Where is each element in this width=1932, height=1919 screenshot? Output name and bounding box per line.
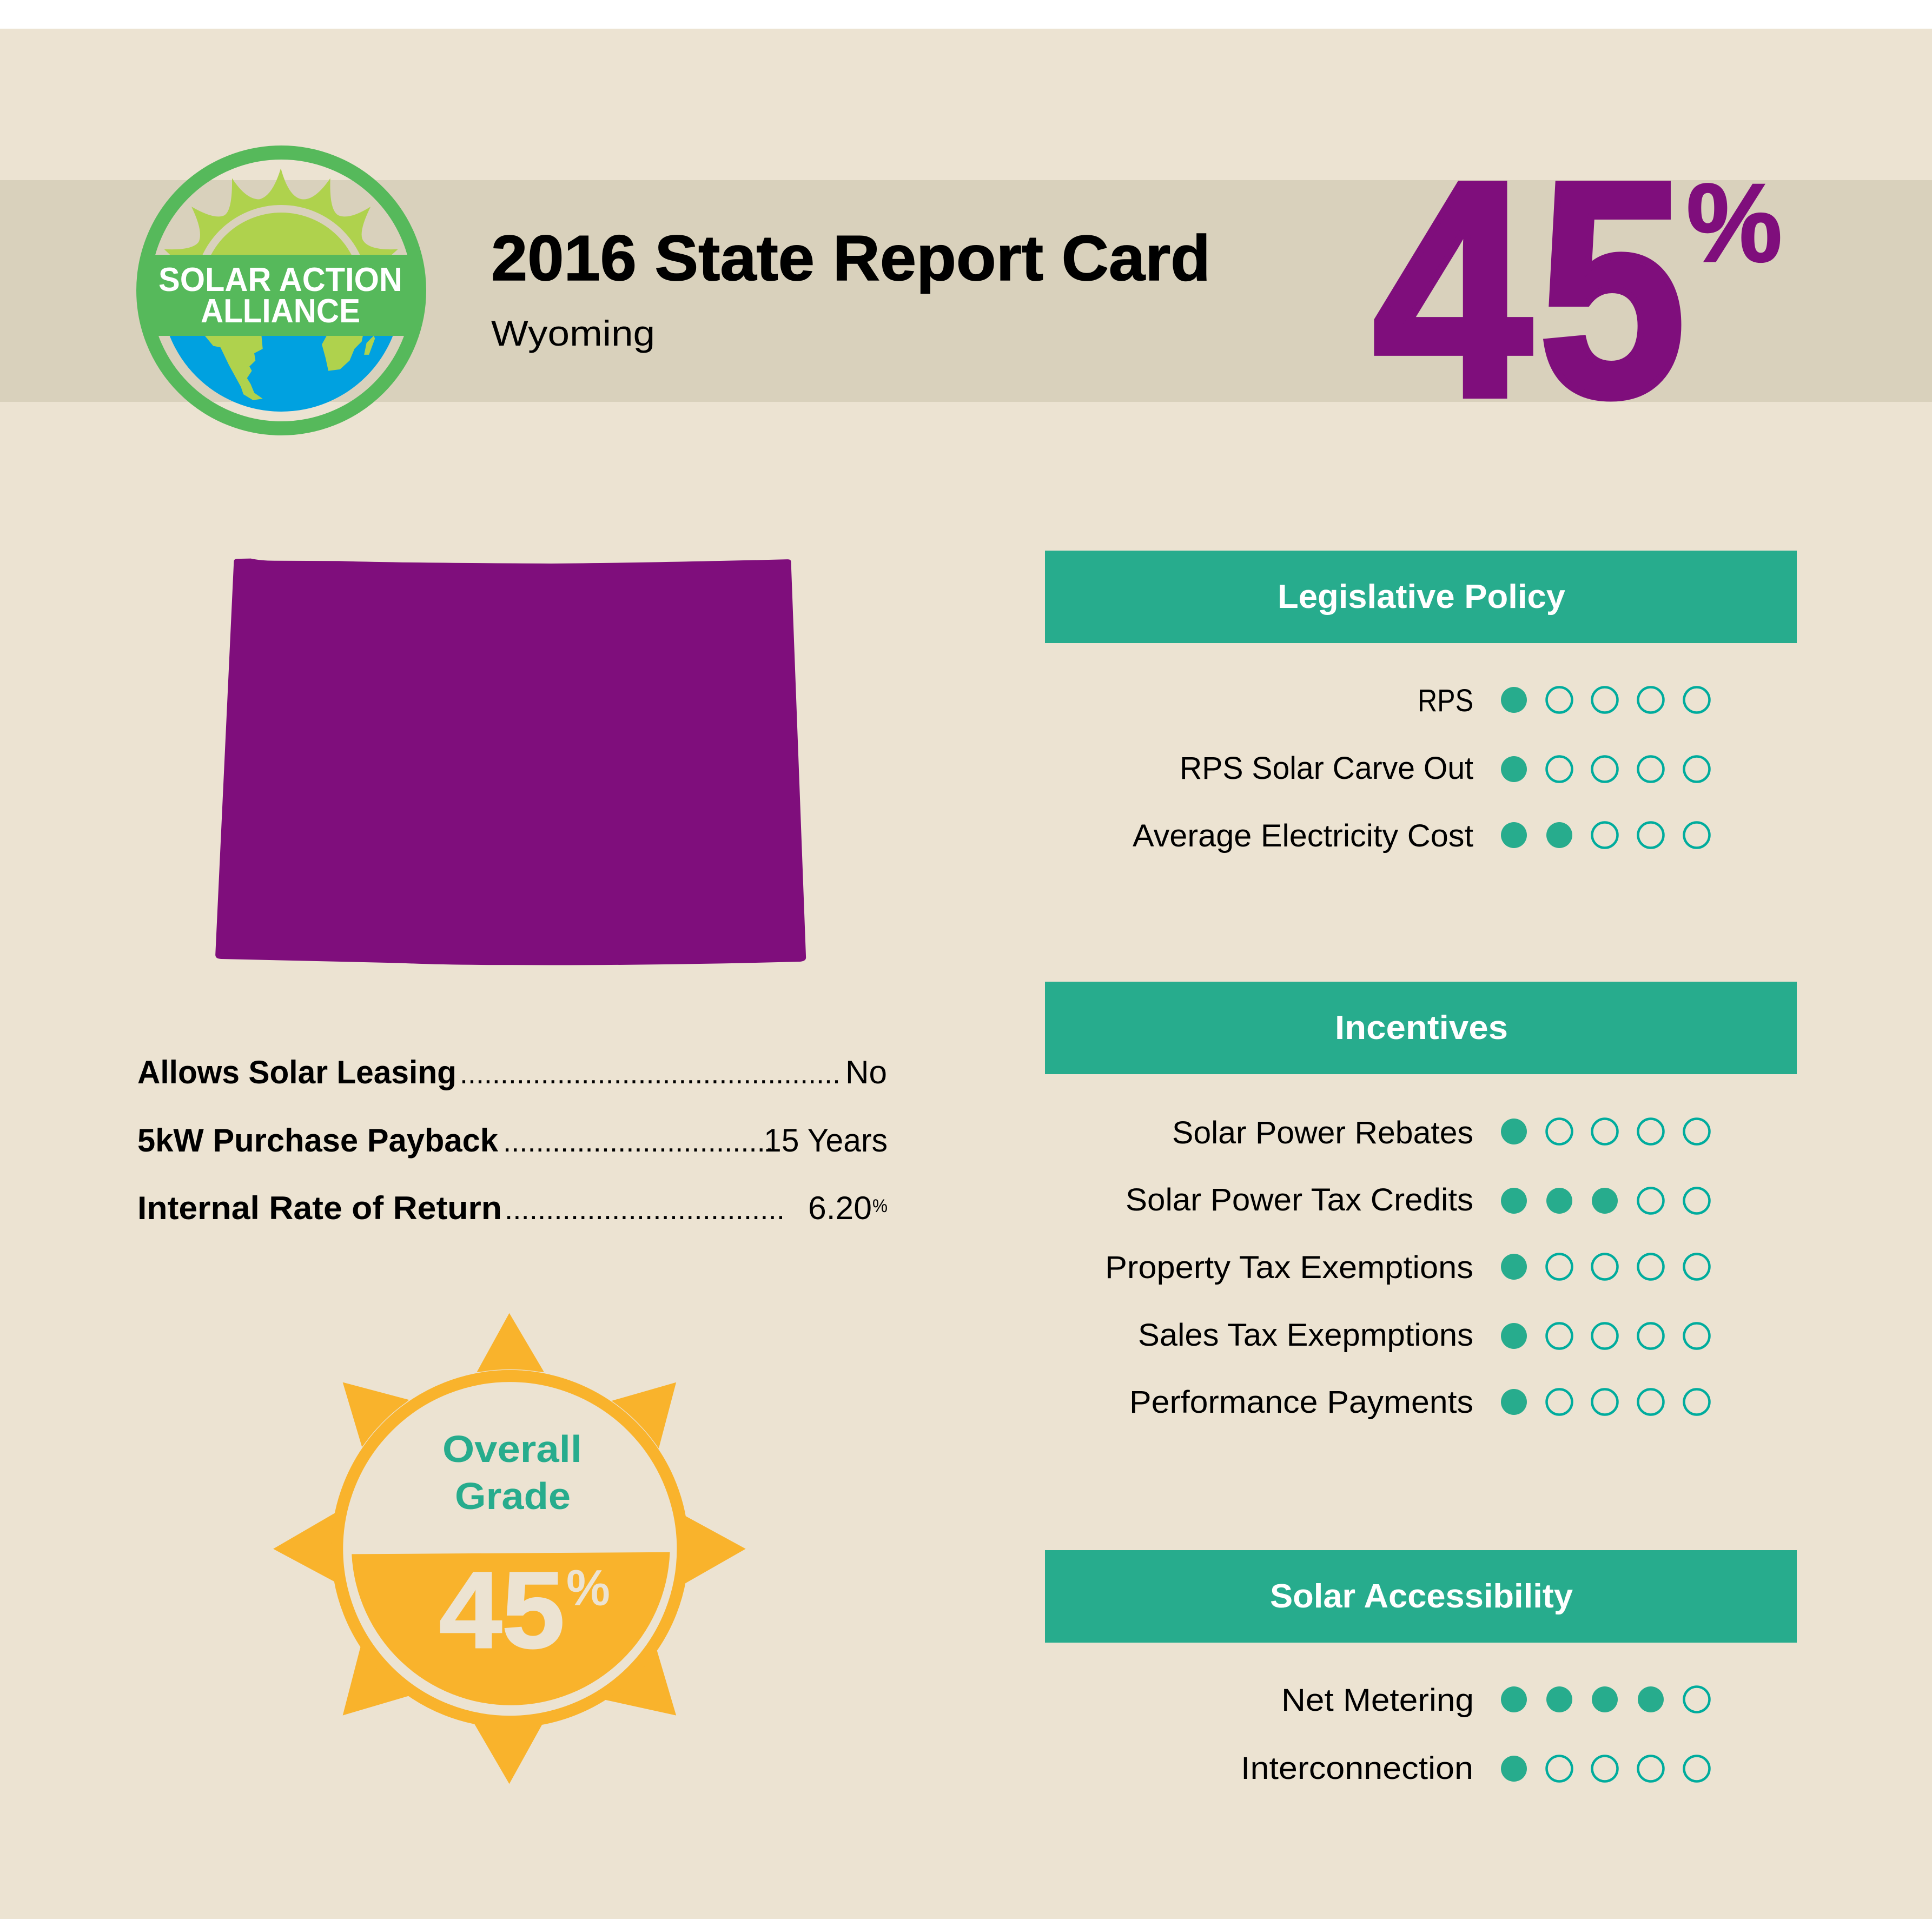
logo green band [142, 255, 421, 336]
subtitle: state name: Wyoming [491, 313, 655, 353]
rating: RPS [1418, 683, 1709, 718]
rating: average electricity cost [1133, 818, 1709, 853]
rating: solar power rebates [1172, 1115, 1709, 1150]
rating: solar power tax credits: Solar Power Tax Credits [1126, 1182, 1473, 1217]
logo earth [170, 336, 393, 412]
rating: solar power rebates: Solar Power Rebates [1172, 1115, 1473, 1150]
header band [0, 180, 1932, 402]
overall grade sun badge [273, 1313, 746, 1784]
badge score: 45 [439, 1549, 565, 1671]
panel: incentives [1045, 982, 1797, 1420]
heading [1045, 1550, 1797, 1643]
panel: solar accessibility [1045, 1550, 1797, 1786]
rating: RPS solar carve out: RPS Solar Carve Out [1180, 751, 1473, 786]
logo wordmark [158, 261, 402, 330]
heading [1045, 982, 1797, 1074]
rating: property tax exemptions: Property Tax Exemptions [1105, 1250, 1473, 1285]
stat: solar leasing [137, 1054, 887, 1090]
map: Wyoming [215, 559, 806, 965]
stat: internal rate of return: 6.20 [808, 1190, 872, 1226]
stats list [137, 1054, 888, 1226]
big score: % [1686, 161, 1782, 285]
rating: RPS solar carve out [1180, 751, 1709, 786]
badge label: Grade [455, 1475, 571, 1517]
stat: solar leasing: ............................................... [460, 1057, 841, 1090]
stat: internal rate of return: % [872, 1196, 888, 1216]
title: 2016 State Report Card [491, 222, 1210, 294]
stat: purchase payback: ................................. [503, 1126, 773, 1158]
stat: purchase payback: 5kW Purchase Payback [137, 1122, 499, 1159]
stat: internal rate of return: .................................. [505, 1193, 785, 1226]
rating: sales tax exemptions [1138, 1318, 1709, 1353]
heading: Solar Accessibility [1270, 1578, 1573, 1615]
rating: net metering: Net Metering [1281, 1683, 1474, 1718]
badge label [442, 1428, 582, 1517]
rating: performance payments: Performance Payments [1129, 1385, 1473, 1420]
sun rays and ring [273, 1313, 746, 1784]
logo: Solar Action Alliance [142, 153, 421, 428]
rating: solar power tax credits [1126, 1182, 1709, 1217]
big score: 5 [1539, 118, 1685, 460]
stat: purchase payback: 15 Years [764, 1122, 888, 1159]
heading [1045, 551, 1797, 643]
badge score: % [566, 1559, 610, 1616]
big score [1374, 181, 1781, 401]
logo wordmark: ALLIANCE [201, 293, 360, 330]
rating: average electricity cost: Average Electricity Cost [1133, 818, 1473, 853]
rating: interconnection [1241, 1751, 1709, 1786]
heading: Incentives [1335, 1009, 1508, 1047]
badge label: Overall [442, 1428, 582, 1470]
panel: legislative policy [1045, 551, 1797, 853]
rating: sales tax exemptions: Sales Tax Exepmptions [1138, 1318, 1473, 1353]
logo outer ring [143, 153, 419, 428]
rating: interconnection: Interconnection [1241, 1751, 1473, 1786]
stat: solar leasing: No [845, 1054, 887, 1090]
stat: solar leasing: Allows Solar Leasing [137, 1054, 456, 1090]
rating: performance payments [1129, 1385, 1709, 1420]
heading: Legislative Policy [1278, 578, 1566, 616]
big score: 4 [1373, 118, 1533, 460]
stat: purchase payback [137, 1122, 888, 1159]
logo wordmark: SOLAR ACTION [158, 261, 402, 299]
logo sun [164, 168, 398, 255]
rating: RPS: RPS [1418, 683, 1473, 718]
stat: internal rate of return: Internal Rate of Return [137, 1190, 502, 1226]
rating: property tax exemptions [1105, 1250, 1709, 1285]
rating: net metering [1281, 1683, 1709, 1718]
stat: internal rate of return [137, 1190, 888, 1226]
